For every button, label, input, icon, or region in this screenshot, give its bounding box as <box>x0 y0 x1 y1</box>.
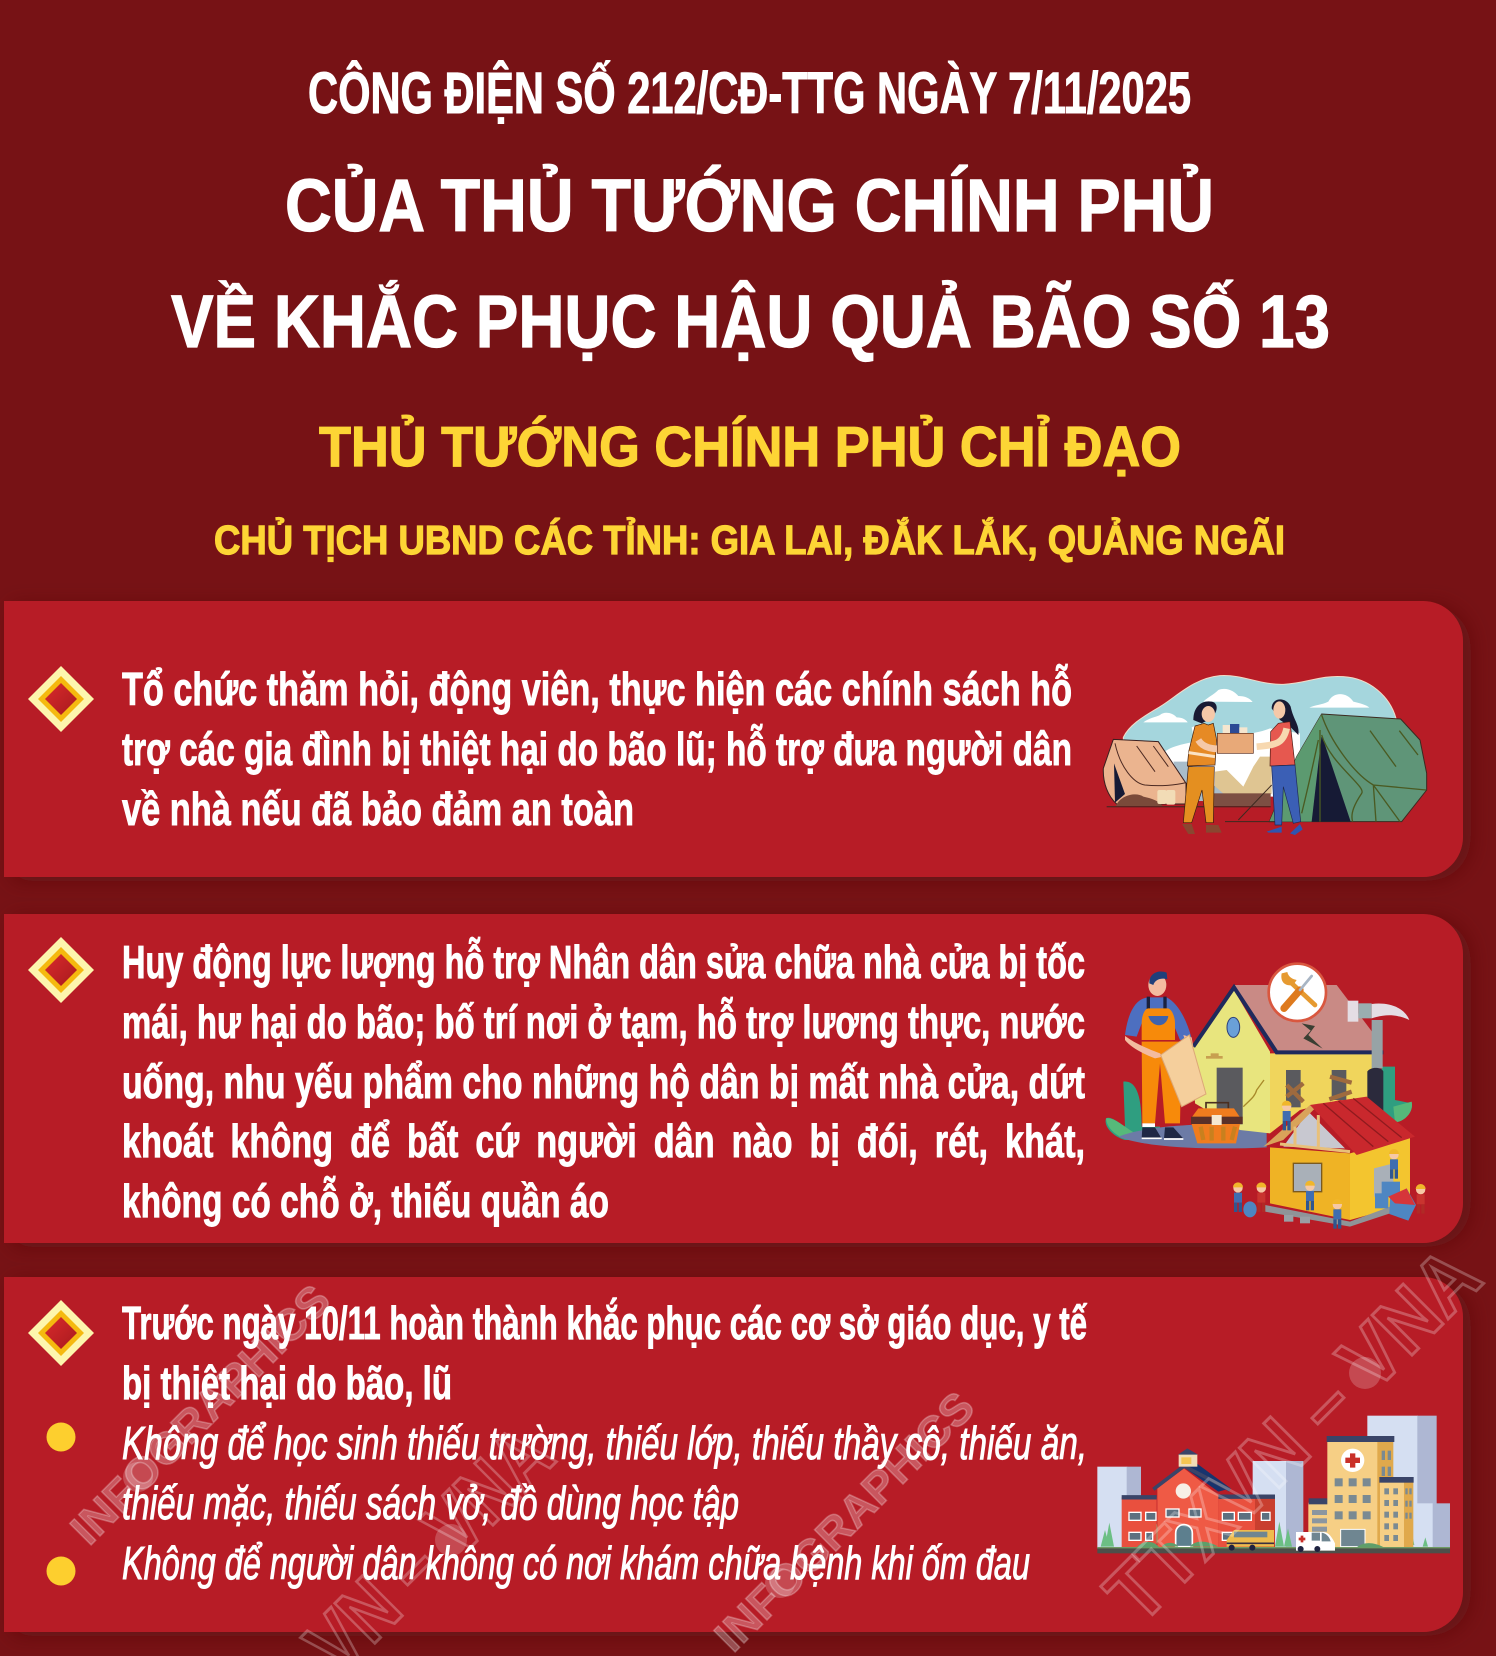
title line 3: VỀ KHẮC PHỤC HẬU QUẢ BÃO SỐ 13 <box>171 280 1330 363</box>
icon: tools badge <box>1269 964 1326 1021</box>
watermarks: INFOGRAPHICS <box>61 1275 340 1554</box>
panel text: Không để người dân không có nơi khám chữa bệnh khi ốm đau <box>122 1537 1030 1589</box>
panel text: thiếu mặc, thiếu sách vở, đồ dùng học tập <box>122 1477 739 1529</box>
icon: diamond <box>28 1300 94 1366</box>
panel text: Huy động lực lượng hỗ trợ Nhân dân sửa chữa nhà cửa bị tốc <box>122 936 1085 988</box>
left volunteer <box>1182 701 1227 834</box>
repairman <box>1125 971 1206 1139</box>
panel text: bị thiệt hại do bão, lũ <box>122 1357 452 1409</box>
addressee yellow: CHỦ TỊCH UBND CÁC TỈNH: GIA LAI, ĐẮK LẮK, QUẢNG NGÃI <box>214 517 1285 563</box>
panel text: về nhà nếu đã bảo đảm an toàn <box>122 783 634 835</box>
illustration: school and hospital <box>1097 1416 1450 1553</box>
ambulance <box>1296 1532 1335 1552</box>
right volunteer <box>1257 699 1303 835</box>
panel text: trợ các gia đình bị thiệt hại do bão lũ; hỗ trợ đưa người dân <box>122 723 1072 775</box>
small workers <box>1233 1101 1426 1229</box>
panel background <box>4 914 1463 1243</box>
watermarks <box>61 1230 1496 1656</box>
subtitle yellow: THỦ TƯỚNG CHÍNH PHỦ CHỈ ĐẠO <box>319 414 1181 479</box>
title line 2: CỦA THỦ TƯỚNG CHÍNH PHỦ <box>285 164 1214 247</box>
panel text: mái, hư hại do bão; bố trí nơi ở tạm, hỗ trợ lương thực, nước <box>122 996 1085 1048</box>
panel text: Không để học sinh thiếu trường, thiếu lớp, thiếu thầy cô, thiếu ăn, <box>122 1417 1087 1469</box>
panel text <box>122 663 1072 835</box>
panel text: uống, nhu yếu phẩm cho những hộ dân bị mất nhà cửa, dứt <box>122 1056 1085 1108</box>
toolbox <box>1191 1103 1243 1143</box>
icon: diamond <box>28 666 94 732</box>
panel text: khoát không để bất cứ người dân nào bị đói, rét, khát, <box>122 1115 1085 1167</box>
bullet dot 2 <box>46 1556 76 1586</box>
title block <box>171 61 1330 563</box>
panel: repair houses <box>4 914 1463 1243</box>
hospital <box>1308 1436 1414 1548</box>
new house <box>1243 1097 1416 1227</box>
panel text: Tổ chức thăm hỏi, động viên, thực hiện các chính sách hỗ <box>122 663 1072 715</box>
panel background <box>4 601 1463 877</box>
school <box>1122 1448 1275 1547</box>
bullet dot 1 <box>46 1422 76 1452</box>
damaged house <box>1193 985 1383 1133</box>
panel text <box>122 936 1085 1227</box>
panel: schools and health <box>4 1277 1463 1632</box>
panel text: không có chỗ ở, thiếu quần áo <box>122 1175 609 1227</box>
ground <box>1097 1548 1450 1553</box>
illustration: house repair <box>1106 964 1426 1229</box>
panel text <box>122 1297 1087 1589</box>
icon: hammer <box>1348 1001 1409 1115</box>
panel background <box>4 1277 1463 1632</box>
icon: diamond <box>28 937 94 1003</box>
illustration: tents and relief <box>1103 676 1427 835</box>
relief box <box>1217 724 1253 753</box>
school bus <box>1227 1530 1274 1551</box>
panel: support families <box>4 601 1463 877</box>
watermarks: INFOGRAPHICS <box>705 1382 984 1656</box>
